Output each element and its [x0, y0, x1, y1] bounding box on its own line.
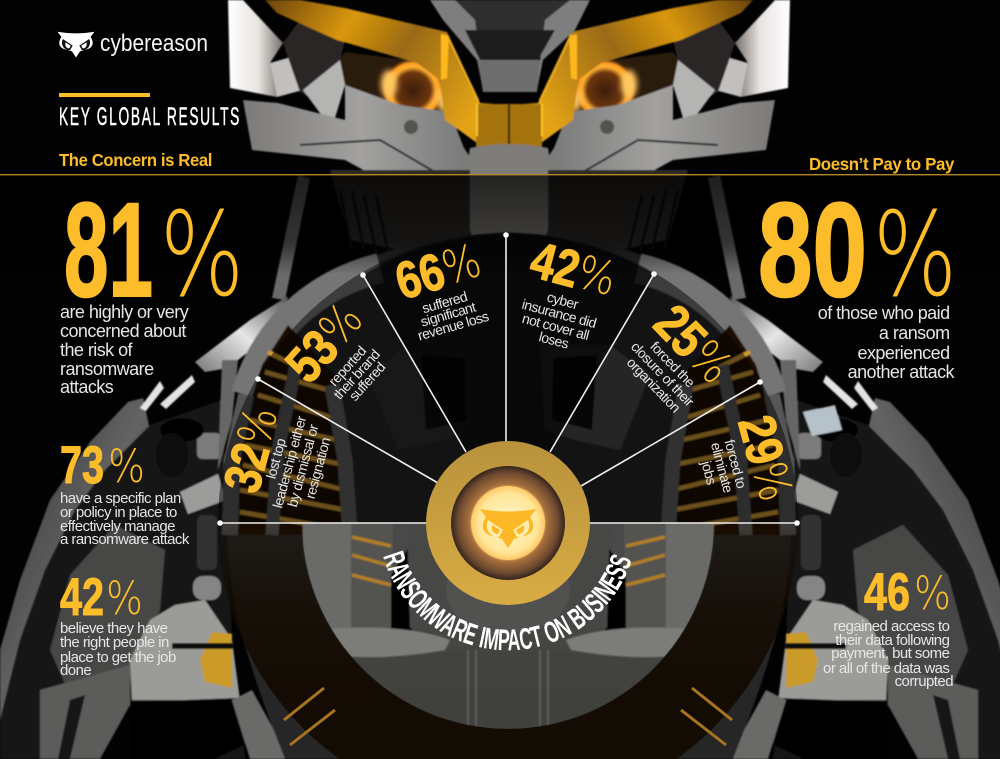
percent sign: % [873, 188, 957, 323]
outer rim [230, 395, 246, 535]
description: resignation [302, 436, 333, 500]
description: concerned about [60, 321, 186, 341]
eye socket [333, 52, 450, 112]
owl pupil right [81, 42, 87, 48]
horizontal gold rule [0, 174, 1000, 175]
center gold plate [476, 104, 542, 147]
head center lower [465, 30, 555, 60]
value: 29 [726, 409, 795, 471]
silver struts [303, 60, 345, 120]
gold center block [476, 103, 543, 147]
fan stat: 25 percent [617, 294, 745, 421]
pipe middle [180, 474, 226, 514]
right arm light patch [803, 405, 842, 436]
cheek plate [243, 85, 480, 222]
slat panel left [351, 523, 393, 635]
value: 32 [213, 437, 281, 499]
white ear [228, 0, 283, 97]
value: 81 [64, 176, 153, 325]
description: place to get the job [60, 649, 176, 666]
center seam [508, 103, 510, 147]
brown iris [451, 466, 565, 580]
torso base [227, 232, 791, 759]
owl eye right [79, 39, 90, 50]
stat: 80 percent [758, 176, 957, 382]
owl silhouette [480, 509, 536, 548]
description: suffered [346, 359, 388, 404]
column left [303, 523, 351, 633]
description: effectively manage [60, 518, 175, 535]
subheading right: Doesn’t Pay to Pay [809, 154, 955, 174]
description: insurance did [520, 296, 598, 331]
lower inner disc [300, 523, 716, 733]
pipe round [160, 418, 204, 442]
fan top sectors [363, 235, 654, 523]
owl pupil left [65, 42, 71, 48]
fan stat: 42 percent [511, 231, 622, 359]
arm outer band [0, 398, 150, 720]
arm inner mass [0, 400, 245, 759]
black gap right [605, 545, 626, 634]
stat: 46 percent [823, 563, 953, 690]
dot [360, 272, 366, 278]
owl eye right [513, 520, 529, 537]
lines [220, 235, 797, 523]
description: loses [537, 328, 571, 352]
description: closure of their [628, 338, 698, 410]
connector lines [217, 232, 800, 526]
dot [794, 520, 800, 526]
description: leadership either [269, 414, 309, 510]
percent sign: % [108, 440, 145, 493]
value: 73 [60, 436, 104, 495]
neck sides right [548, 170, 688, 250]
description: organization [624, 354, 684, 415]
description: reported [325, 343, 369, 389]
pipe lower [193, 576, 221, 600]
description: corrupted [895, 673, 953, 690]
lower arm streaks [40, 665, 130, 759]
percent sign: % [914, 567, 951, 620]
rib panel right [668, 325, 788, 535]
percent sign: % [572, 244, 622, 306]
owl eye left [487, 520, 503, 537]
dot [651, 271, 657, 277]
accent bar [59, 93, 150, 97]
description: their data following [835, 632, 950, 649]
description: jobs [698, 458, 720, 486]
neck oval [466, 144, 552, 240]
center upper window right [552, 355, 597, 430]
rib strut [722, 365, 746, 535]
value: 42 [60, 568, 104, 627]
description: done [60, 662, 91, 679]
owl eye left [62, 39, 73, 50]
arm gray patch [50, 525, 165, 695]
subheading left: The Concern is Real [59, 150, 212, 170]
slats [352, 537, 665, 585]
arm fins [140, 375, 195, 411]
description: ransomware [60, 359, 154, 379]
logo owl [58, 32, 94, 58]
pipe dark [156, 433, 188, 477]
value: 46 [864, 563, 910, 622]
description: are highly or very [60, 302, 189, 322]
black gap left [391, 545, 412, 634]
center upper window left [421, 355, 466, 430]
fan stat: 53 percent [275, 291, 402, 418]
lower rim slats [284, 688, 732, 745]
shoulder band right [638, 268, 772, 395]
description: of those who paid [818, 303, 950, 323]
gold highlight [441, 34, 449, 80]
block left [406, 546, 412, 629]
dot [217, 520, 223, 526]
pipe upper [197, 433, 221, 459]
neck under ring [447, 580, 569, 635]
lower arm dark streak [58, 695, 85, 759]
stat: 42 percent people [60, 568, 179, 679]
outer rim [772, 395, 788, 535]
left eye glow [381, 58, 445, 122]
gold ribs [673, 352, 778, 530]
description: eliminate [708, 441, 737, 495]
owl pupil right [516, 525, 524, 534]
head center v band [430, 0, 590, 90]
slat panel right [624, 523, 666, 635]
description: the right people in [60, 634, 169, 651]
percent sign: % [308, 292, 373, 356]
gold brow band [265, 0, 509, 147]
gold block [200, 632, 232, 688]
block right [604, 546, 610, 629]
description: lost top [263, 436, 289, 480]
description: significant [419, 299, 478, 330]
value: 42 [524, 231, 586, 299]
logo wordmark: cybereason [100, 30, 208, 57]
gold edge right [541, 104, 543, 136]
inner base [301, 524, 664, 729]
head center panel [478, 60, 540, 92]
rib strut [272, 365, 296, 535]
value: 53 [275, 319, 350, 394]
stat: 73 percent [60, 436, 190, 548]
dot [757, 379, 763, 385]
dot [503, 232, 509, 238]
eye hot spot [381, 70, 397, 98]
impact fan upper half [218, 233, 798, 523]
description: attacks [60, 377, 114, 397]
neck strut [272, 175, 310, 300]
eye hot spot [437, 88, 449, 112]
description: experienced [858, 343, 950, 363]
arc label: RANSOMWARE IMPACT ON BUSINESS [383, 550, 631, 650]
description: suffered [420, 288, 469, 316]
dot [255, 376, 261, 382]
owl pupil left [492, 525, 500, 534]
dots [217, 232, 800, 526]
curved strip left [318, 628, 450, 657]
value: 80 [758, 176, 867, 325]
description: their brand [330, 346, 383, 402]
heading: KEY GLOBAL RESULTS [59, 103, 241, 131]
impact fan lower rim [218, 523, 798, 759]
percent sign: % [742, 456, 804, 507]
center upper plate right [540, 345, 650, 450]
description: or all of the data was [823, 660, 949, 677]
description: or policy in place to [60, 504, 177, 521]
description: forced to [722, 438, 750, 490]
neck sides [330, 170, 470, 250]
cheek shadow line [300, 140, 455, 210]
robot right half [509, 0, 1000, 759]
gold ribs [240, 352, 345, 530]
description: the risk of [60, 340, 134, 360]
value: 66 [389, 242, 451, 311]
gold edge [447, 35, 478, 140]
value: 25 [643, 294, 718, 369]
description: forced the [647, 338, 699, 391]
fan stat: 32 percent [211, 396, 338, 517]
lower black gap [130, 698, 245, 759]
description: believe they have [60, 620, 168, 637]
face cheek bolt [404, 120, 418, 134]
stat: 81 percent [60, 176, 244, 397]
crumpled silver [270, 43, 340, 97]
description: revenue loss [416, 308, 491, 343]
arm pipes [156, 418, 226, 600]
center upper plate left [368, 345, 478, 450]
owl silhouette [58, 32, 94, 58]
description: regained access to [833, 618, 950, 635]
hip strut [218, 360, 238, 470]
percent sign: % [160, 188, 244, 323]
fan stat: 29 percent [690, 409, 804, 517]
lower strut [232, 690, 290, 759]
head center top [440, 0, 580, 30]
neck ridges [340, 190, 678, 252]
description: a ransom [879, 323, 950, 343]
gold ring [426, 441, 590, 605]
description: cyber [545, 289, 581, 312]
rib panel fill [673, 325, 782, 535]
curved strip right [566, 628, 698, 657]
silver upper mass [283, 20, 345, 110]
percent sign: % [436, 233, 487, 295]
rib edge [332, 385, 350, 535]
description: another attack [848, 362, 956, 382]
column right [665, 523, 715, 633]
percent sign: % [226, 401, 288, 451]
cables [197, 515, 217, 570]
description: have a specific plan [60, 490, 181, 507]
silver shard [195, 296, 288, 372]
robot left half [0, 0, 509, 759]
percent sign: % [678, 329, 743, 394]
shoulder band left [246, 268, 380, 395]
glow core [471, 486, 545, 560]
armor block [130, 600, 240, 700]
rib panel left [230, 325, 350, 535]
description: a ransomware attack [60, 531, 190, 548]
description: by dismissal or [284, 422, 322, 509]
center column lines [468, 650, 548, 733]
description: payment, but some [831, 645, 950, 662]
central owl emblem [426, 441, 590, 605]
upper dark overlay [0, 174, 1000, 274]
gold edge left [476, 104, 478, 136]
rib panel fill [236, 325, 345, 535]
dark bar [172, 643, 234, 649]
rib edge [668, 385, 686, 535]
fan stat: 66 percent [389, 232, 497, 345]
owl icon [480, 509, 536, 548]
logo [58, 30, 208, 58]
percent sign: % [106, 572, 143, 625]
description: not cover all [521, 310, 591, 343]
